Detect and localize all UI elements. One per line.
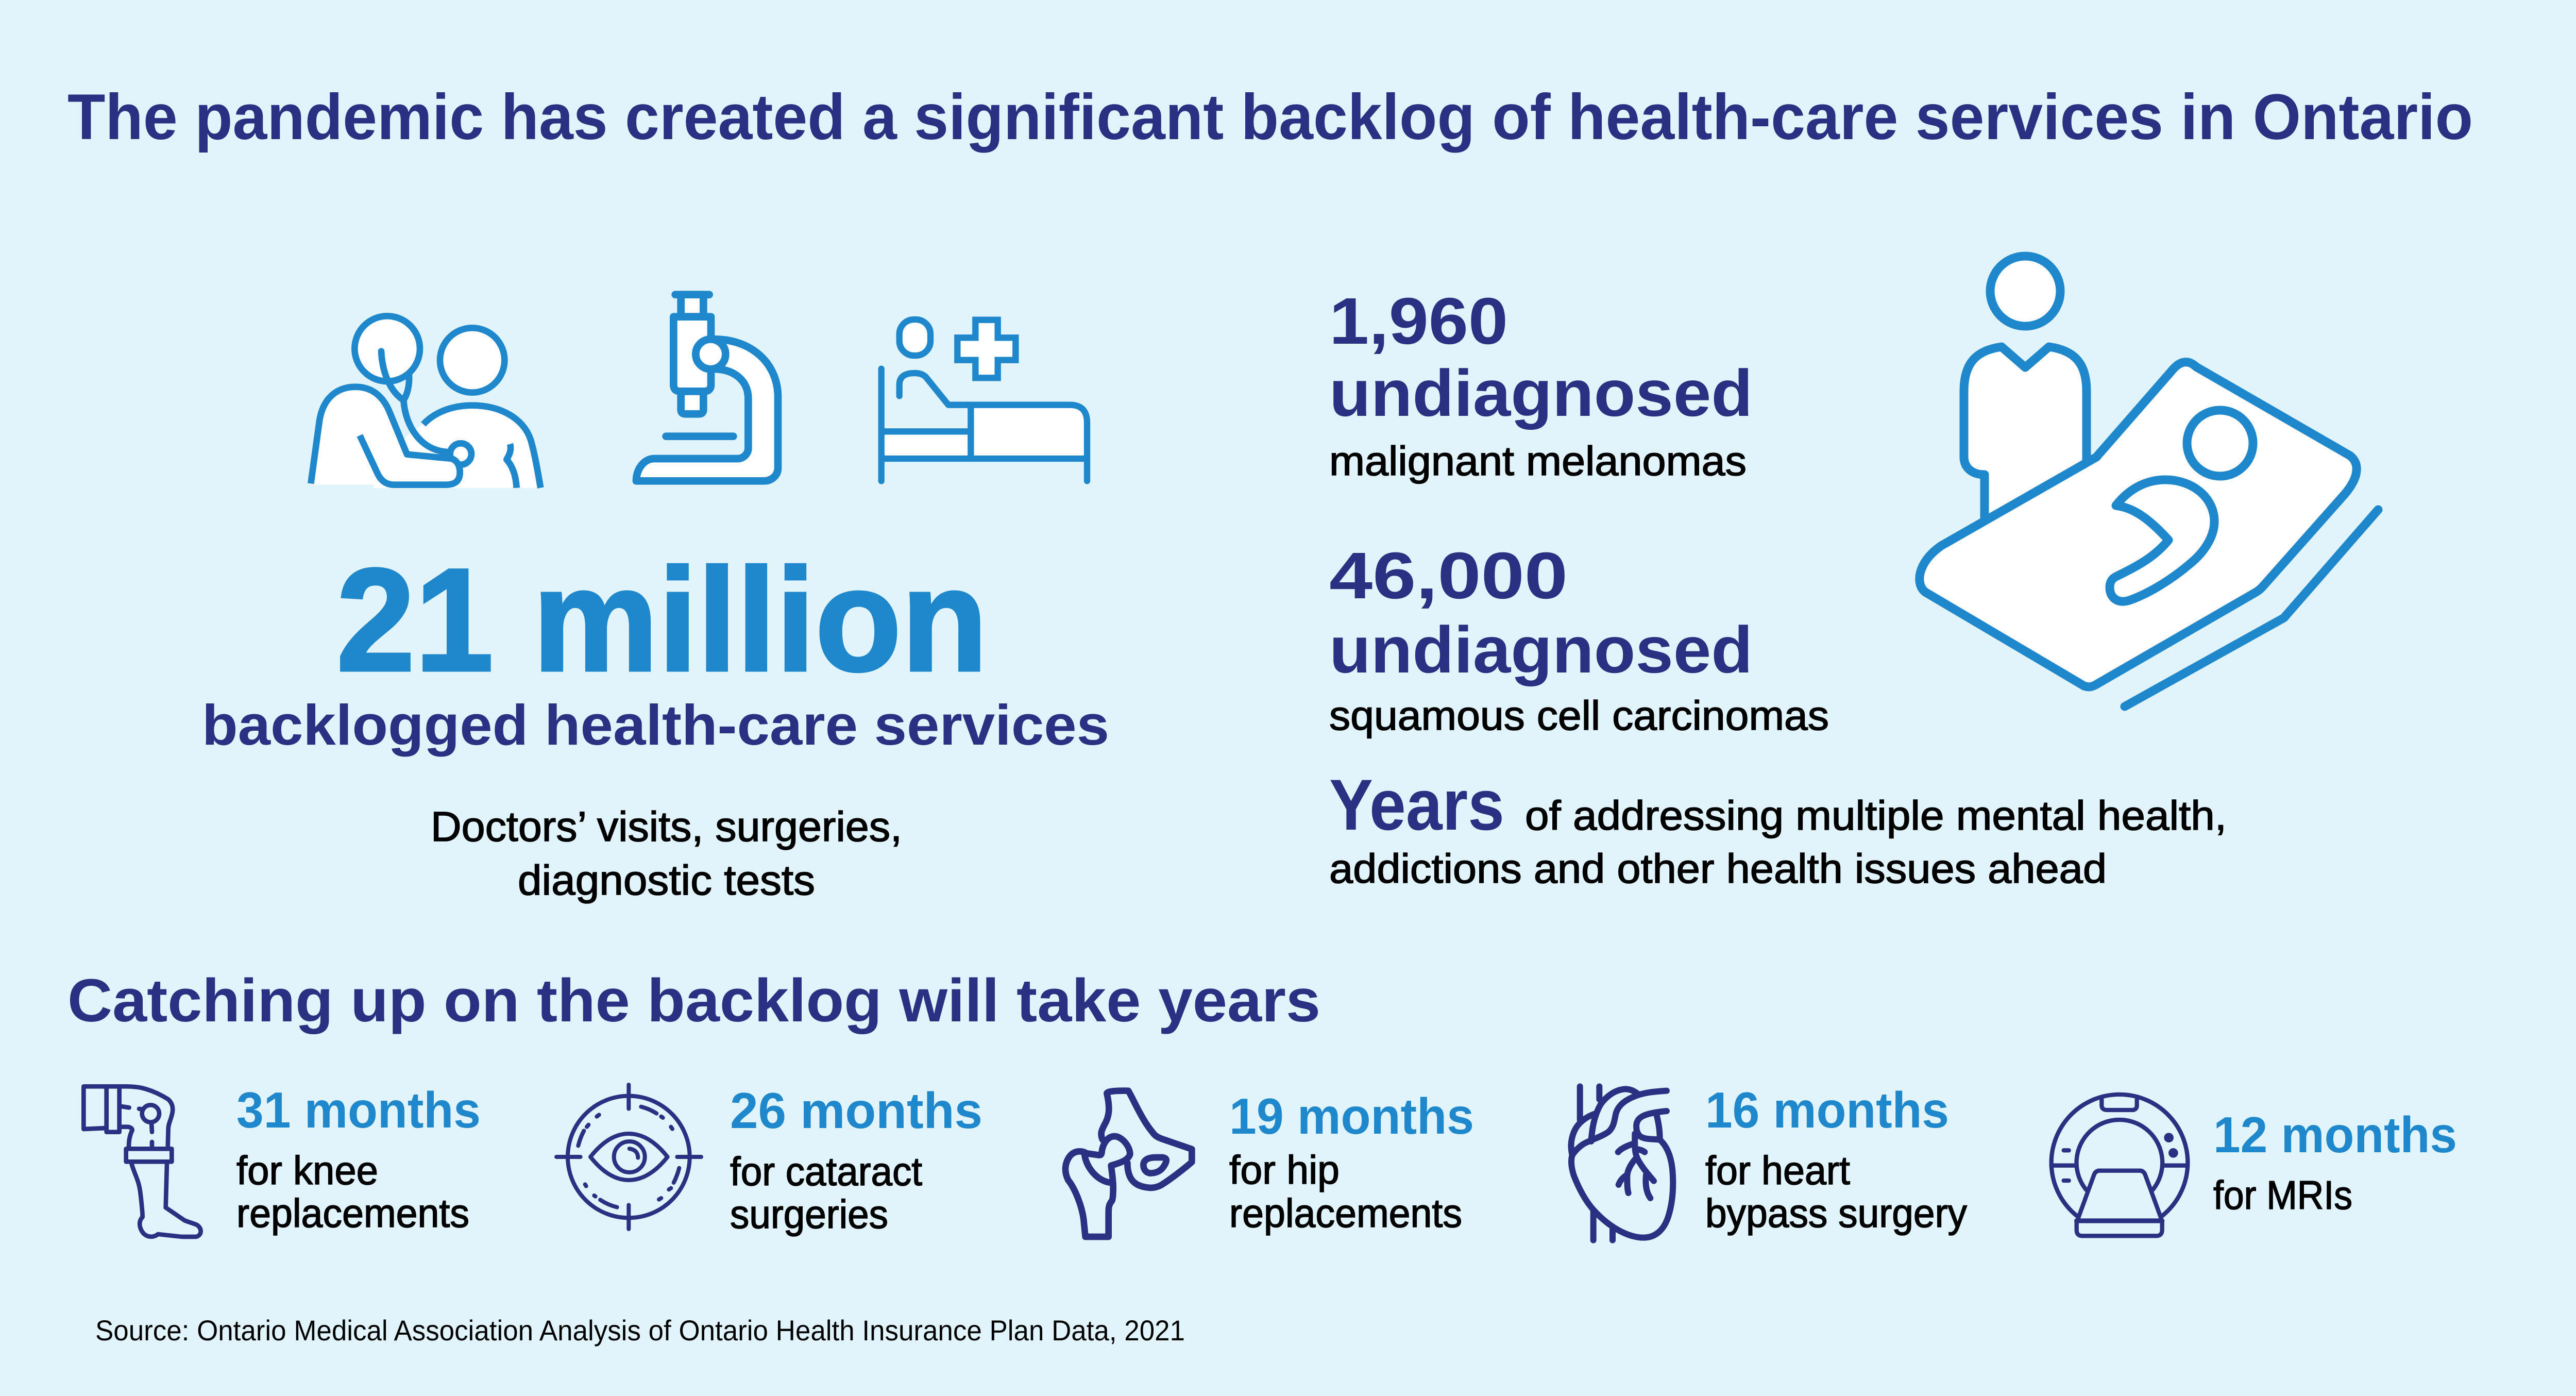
source: Source: Ontario Medical Association Analysis of Ontario Health Insurance Plan Data, 2021 xyxy=(95,1314,1185,1347)
panel: heart bypass surgery xyxy=(1571,1082,1967,1240)
text: for heart bypass surgery: for heart xyxy=(1705,1148,1850,1193)
panel: MRIs xyxy=(2052,1095,2457,1236)
stat: 46,000 carcinomas: squamous cell carcinomas xyxy=(1329,693,1829,738)
text: doctors' visits, surgeries, diagnostic tests xyxy=(431,803,902,904)
icon: heart xyxy=(1571,1086,1673,1240)
stat: years of mental health issues: Years xyxy=(1329,764,1504,845)
stat: years of mental health issues xyxy=(1329,764,2227,892)
icon: knee xyxy=(83,1086,201,1237)
icon: eye target xyxy=(556,1085,701,1229)
text: 19 months: 19 months xyxy=(1229,1088,1474,1145)
stat: 46,000 carcinomas xyxy=(1329,539,1829,738)
stat: 1,960 melanomas: 1,960 xyxy=(1329,284,1508,358)
text: doctors' visits, surgeries, diagnostic tests: diagnostic tests xyxy=(518,857,815,904)
stat: years of mental health issues: addictions and other health issues ahead xyxy=(1329,846,2107,892)
icon: hip joint xyxy=(1065,1091,1192,1237)
text: 12 months: 12 months xyxy=(2213,1106,2457,1163)
stat: 1,960 melanomas xyxy=(1329,284,1753,484)
text: 26 months: 26 months xyxy=(730,1082,982,1139)
text: for knee replacements: for knee xyxy=(236,1148,378,1193)
heading: catching up: Catching up on the backlog will take years xyxy=(67,967,1320,1035)
panel: cataract surgeries xyxy=(556,1082,982,1237)
text: doctors' visits, surgeries, diagnostic tests: Doctors’ visits, surgeries, xyxy=(431,803,902,850)
text: for cataract surgeries: for cataract xyxy=(730,1149,922,1194)
icon: doctor beside patient in bed xyxy=(1920,256,2378,707)
big number: 21 million: 21 million xyxy=(336,539,988,702)
stat: 1,960 melanomas: malignant melanomas xyxy=(1329,438,1747,484)
stat: 46,000 carcinomas: 46,000 xyxy=(1329,539,1568,613)
panel: undiagnosed statistics xyxy=(1329,284,2227,892)
text: for cataract surgeries xyxy=(730,1149,922,1237)
subheading: backlogged services: backlogged health-care services xyxy=(202,694,1109,757)
text: for heart bypass surgery: bypass surgery xyxy=(1705,1190,1967,1236)
panel: 21 million backlog xyxy=(202,295,1109,904)
text: for hip replacements: replacements xyxy=(1229,1190,1462,1236)
icon: microscope xyxy=(636,295,778,481)
text: for knee replacements xyxy=(236,1148,469,1236)
text: for hip replacements xyxy=(1229,1147,1462,1236)
stat: 1,960 melanomas: undiagnosed xyxy=(1329,357,1753,430)
text: for cataract surgeries: surgeries xyxy=(730,1191,888,1237)
stat: 46,000 carcinomas: undiagnosed xyxy=(1329,613,1753,687)
text: for MRIs: for MRIs xyxy=(2213,1172,2352,1218)
panel: knee replacements xyxy=(83,1082,481,1237)
stat: years of mental health issues: of addressing multiple mental health, xyxy=(1525,793,2227,838)
text: for knee replacements: replacements xyxy=(236,1190,469,1236)
panel: hip replacements xyxy=(1065,1088,1474,1237)
icon: doctor with stethoscope and patient xyxy=(311,316,540,488)
text: for hip replacements: for hip xyxy=(1229,1147,1340,1192)
text: 16 months: 16 months xyxy=(1705,1082,1949,1138)
text: for heart bypass surgery xyxy=(1705,1148,1967,1236)
icon: MRI machine xyxy=(2052,1095,2188,1236)
title: The pandemic has created a significant backlog of health-care services in Ontario xyxy=(67,81,2473,153)
icon: hospital bed with cross xyxy=(882,319,1087,481)
text: 31 months: 31 months xyxy=(236,1082,481,1138)
